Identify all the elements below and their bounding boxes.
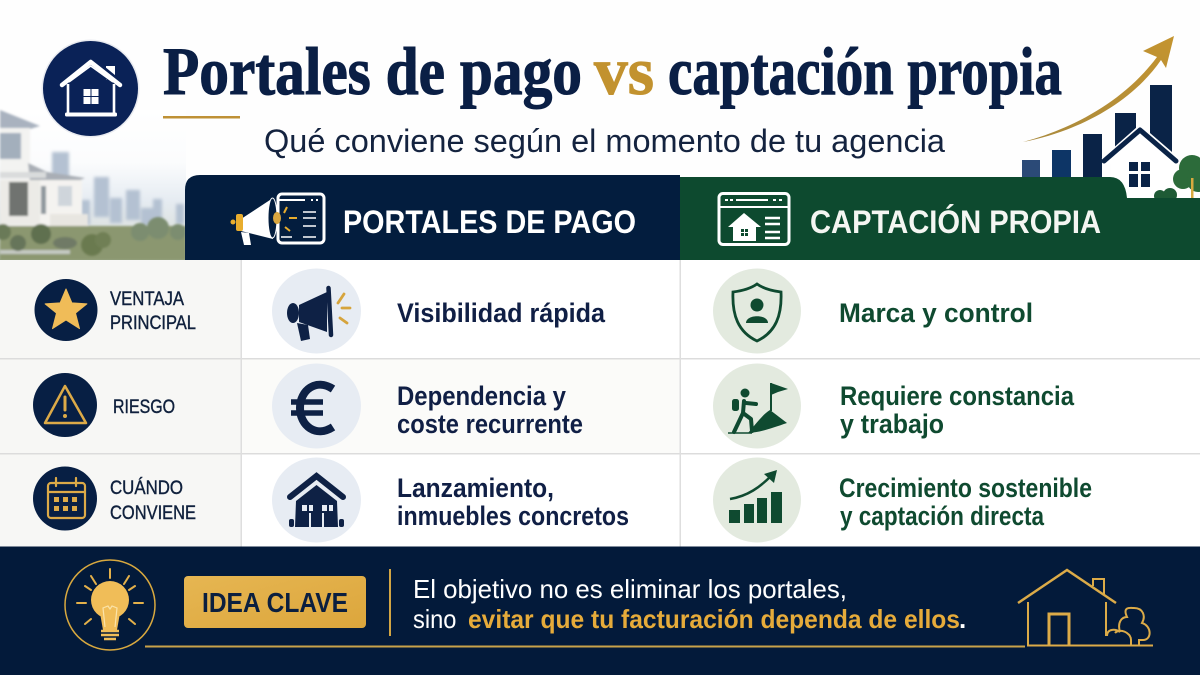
title: captación propia: captación propia bbox=[668, 33, 1062, 109]
cell text: coste recurrente bbox=[397, 409, 583, 439]
cell text: y captación directa bbox=[840, 501, 1045, 531]
cell text: Lanzamiento, bbox=[397, 473, 554, 503]
portales: visibilidad rápida bbox=[272, 268, 606, 354]
icon: calendar bbox=[33, 466, 97, 530]
footer band: idea clave bbox=[0, 546, 1200, 675]
title underline bbox=[163, 116, 240, 118]
small white house bbox=[1104, 130, 1176, 200]
background scene: house and skyline bbox=[0, 110, 186, 260]
icon: star bbox=[34, 279, 98, 341]
header: portales de pago bbox=[185, 175, 680, 260]
icon: line house and tree bbox=[1018, 570, 1153, 646]
subtitle: Qué conviene según el momento de tu agencia bbox=[264, 123, 945, 159]
icon: shield person bbox=[713, 268, 801, 354]
title: vs: vs bbox=[594, 33, 654, 109]
key message: evitar que tu facturación dependa de ellos bbox=[468, 604, 960, 634]
cell text: Dependencia y bbox=[397, 381, 566, 411]
icon: house logo bbox=[42, 40, 140, 138]
captación: crecimiento sostenible bbox=[713, 458, 1092, 542]
comparison table background bbox=[0, 260, 1200, 547]
cell text: y trabajo bbox=[840, 409, 944, 439]
icon: light bulb bbox=[65, 560, 155, 650]
row label: riesgo bbox=[33, 373, 175, 437]
icon: warning triangle bbox=[33, 373, 97, 437]
label text: CONVIENE bbox=[110, 503, 196, 524]
cell text: Requiere constancia bbox=[840, 381, 1075, 411]
label text: RIESGO bbox=[113, 397, 175, 418]
cell text: Visibilidad rápida bbox=[397, 298, 606, 328]
portales: dependencia y coste bbox=[272, 364, 583, 448]
row label: cuándo conviene bbox=[33, 466, 196, 530]
icon: hiker and flag bbox=[713, 364, 801, 448]
row label: ventaja principal bbox=[34, 279, 196, 341]
gold baseline bbox=[145, 646, 1025, 648]
captación: marca y control bbox=[713, 268, 1033, 354]
icon: euro bbox=[272, 364, 361, 448]
icon: web page with house bbox=[719, 194, 789, 244]
icon: house bbox=[272, 458, 361, 542]
cell text: Marca y control bbox=[839, 298, 1033, 328]
trees bbox=[1154, 155, 1200, 202]
icon: megaphone bbox=[272, 268, 361, 354]
badge bbox=[184, 576, 366, 628]
key message: . bbox=[959, 604, 966, 634]
label text: VENTAJA bbox=[110, 289, 184, 310]
key message: El objetivo no es eliminar los portales, bbox=[413, 574, 847, 604]
key message: sino bbox=[413, 604, 463, 634]
top-right growth chart with arrow and house bbox=[1022, 36, 1200, 202]
title: Portales de pago bbox=[163, 33, 582, 109]
label text: PRINCIPAL bbox=[110, 313, 196, 334]
badge: IDEA CLAVE bbox=[202, 587, 348, 618]
cell text: Crecimiento sostenible bbox=[839, 473, 1092, 503]
portales: lanzamiento bbox=[272, 458, 629, 542]
header label: CAPTACIÓN PROPIA bbox=[810, 204, 1101, 240]
growth bars bbox=[1022, 85, 1172, 180]
captación: requiere constancia bbox=[713, 364, 1075, 448]
cell text: inmuebles concretos bbox=[397, 501, 629, 531]
header: captación propia bbox=[680, 177, 1200, 260]
icon: rising bars bbox=[713, 458, 801, 542]
gold growth arrow bbox=[1023, 36, 1174, 142]
icon: megaphone with screen bbox=[230, 194, 324, 245]
header label: PORTALES DE PAGO bbox=[343, 204, 636, 240]
divider bbox=[389, 569, 391, 636]
label text: CUÁNDO bbox=[110, 478, 183, 499]
